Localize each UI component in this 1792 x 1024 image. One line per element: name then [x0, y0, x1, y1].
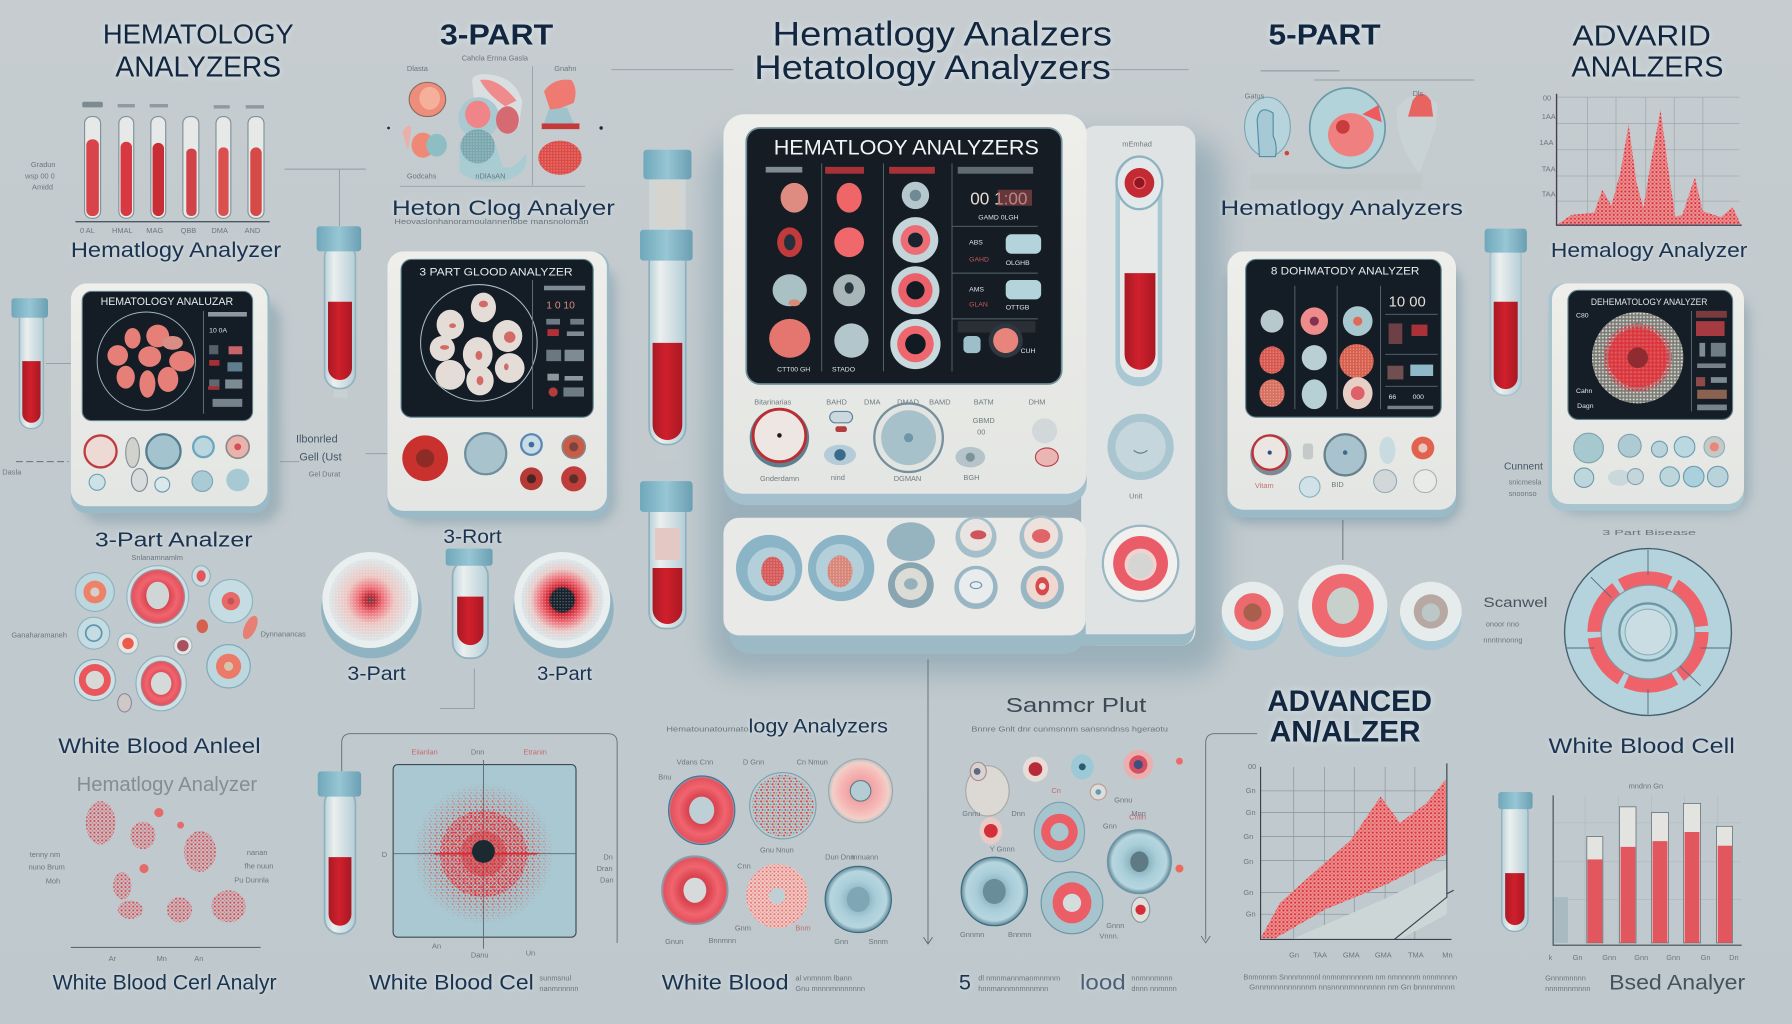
screen: Cahn	[1576, 388, 1593, 395]
labels: Cn	[1051, 786, 1061, 795]
dish right	[513, 552, 614, 658]
bar chart: k	[1549, 953, 1553, 962]
heading: White Blood Anleel: White Blood Anleel	[58, 733, 261, 758]
labels: Mn	[157, 954, 167, 963]
heading: Hematology Analyzers: HEMATOLOGY	[103, 18, 294, 49]
panel: right column of central analyzer: mEmhad	[1122, 139, 1152, 148]
readout column 4: CUH	[1021, 348, 1035, 355]
cup large center	[1297, 565, 1389, 657]
tube: far left	[11, 298, 48, 429]
knob: Unit	[1129, 491, 1142, 500]
axis labels: MAG	[146, 226, 163, 235]
caption: Hematlogy Analyzer: Hematlogy Analyzer	[71, 237, 281, 262]
panel: sample tray	[723, 515, 1086, 654]
tubes: center-left stack	[640, 150, 693, 629]
small side labels: Gel Durat	[309, 470, 340, 479]
screen: HEMATOLOGY ANALUZAR	[101, 296, 233, 308]
segmented ring	[1565, 549, 1731, 715]
labels: Y Gnnn	[990, 844, 1015, 853]
main controls: DMA	[864, 398, 881, 407]
panel: donut cells	[658, 716, 893, 995]
readout column 4	[777, 189, 1041, 373]
bar chart: Gnn	[1602, 953, 1616, 962]
labels: Ar	[109, 954, 117, 963]
plot labels: Dnn	[471, 747, 484, 756]
small side labels	[2, 363, 1543, 498]
peak chart: 00	[1543, 94, 1551, 103]
diagram of cells: Gnahn	[554, 64, 577, 73]
main controls: Gnderdamn	[760, 474, 799, 483]
main screen: HEMATLOOY ANALYZERS	[774, 134, 1039, 159]
scatter chart: Gn	[1243, 888, 1253, 897]
heading: Hematology Analyzers main: Hematlogy Analzers	[773, 16, 1112, 54]
tube: empty top	[643, 150, 691, 234]
plot labels: Dn	[603, 852, 613, 861]
peak chart: TAA	[1542, 164, 1556, 173]
bar chart: Gnn	[1666, 953, 1680, 962]
caption: White Blood: Gnu mnnnmnnnnnnn	[795, 984, 865, 993]
readout column 4: AMS	[969, 286, 984, 293]
caption: White Blood	[662, 970, 865, 995]
plot labels: Dan	[600, 875, 614, 884]
plot area	[393, 760, 576, 949]
small side labels: Cunnent	[1504, 462, 1543, 473]
cells	[961, 750, 1183, 934]
bar chart: mndnn Gn	[1629, 782, 1663, 791]
labels: Bnnmn	[1008, 930, 1031, 939]
labels: Gnn	[834, 937, 848, 946]
scatter chart: Gn	[1246, 786, 1256, 795]
vertical arrow divider	[923, 659, 933, 944]
panel: 3-part anatomy	[387, 20, 615, 226]
tube: middle	[640, 230, 693, 459]
screen	[1568, 290, 1733, 419]
labels: 3-Part: 3-Rort	[443, 526, 502, 548]
panel: central scatter plot	[318, 734, 617, 995]
heading: 3-PART: 3-PART	[440, 20, 554, 52]
labels: Bnm	[795, 923, 811, 932]
caption: 5 Blood: 5	[959, 970, 971, 995]
axis labels: QBB	[181, 226, 196, 235]
diagram of cells: Cahcla Ernna Gasla	[462, 54, 529, 63]
readout column 4: CTT00 GH	[777, 366, 810, 373]
heading: Advanced Analyzers: ANALZERS	[1571, 52, 1723, 84]
panel: 5-part	[1221, 20, 1463, 220]
main controls: DGMAN	[894, 474, 921, 483]
screen: 10 0A	[209, 328, 227, 335]
diagram of cells: Dls	[1413, 89, 1424, 98]
labels: Vnnn.	[1099, 931, 1119, 940]
label: Scanwel: Scanwel	[1483, 595, 1547, 610]
axis labels	[24, 160, 260, 235]
labels: Vdans Cnn	[677, 758, 713, 767]
heading: 3-Part Analzer: 3-Part Analzer	[95, 528, 253, 551]
labels: 3-Part: 3-Part	[347, 663, 406, 685]
heading: Advanced Analyzers: ADVARID	[1573, 21, 1711, 53]
readout column 4: GAMD 0LGH	[978, 214, 1019, 221]
caption: 5 Blood: dl nmnmannmanmnmnm	[978, 974, 1060, 983]
labels	[29, 848, 273, 963]
main controls: DMAD	[897, 398, 919, 407]
labels: Cnlln	[1129, 812, 1146, 821]
panel: ring diagram: 3 Part Bisease	[1602, 528, 1696, 537]
red well	[1103, 526, 1178, 601]
screen: 8 DOHMATODY ANALYZER	[1271, 265, 1419, 277]
labels	[960, 786, 1146, 940]
panel: 3-part cells: Snlanamnamlm	[131, 553, 183, 562]
heading: ADVANCED ANALZER: AN/ALZER	[1270, 716, 1421, 749]
peak chart: 1AA	[1542, 112, 1556, 121]
labels: Gnnmn	[960, 930, 984, 939]
main controls	[750, 398, 1058, 483]
plot labels: Etranin	[523, 747, 547, 756]
scatter chart: GMA	[1375, 951, 1392, 960]
screen	[1246, 259, 1441, 417]
heading: Hematology Analyzers: ANALYZERS	[115, 52, 281, 84]
main screen	[746, 128, 1062, 384]
panel: 3-part cells	[11, 528, 306, 712]
panel: analyzer device 1	[71, 283, 281, 523]
labels: Dnn	[1011, 809, 1025, 818]
controls	[85, 434, 249, 492]
labels: Gnnn	[1106, 921, 1124, 930]
caption: Blood Analyzer: nnnmnnmnnn	[1545, 984, 1590, 993]
diagram of cells: Gatus	[1245, 91, 1265, 100]
diagram of cells: Godcahs	[407, 171, 437, 180]
cell icons column 1	[769, 183, 810, 358]
panel: central analyzer	[723, 114, 1087, 505]
heading: 5-PART: 5-PART	[1269, 20, 1381, 52]
scatter chart: TAA	[1313, 951, 1327, 960]
main controls: GBMD	[973, 416, 995, 425]
panel: sample plot	[959, 694, 1183, 995]
panel: analyzer device 2	[387, 251, 616, 523]
label: Scanwel	[1483, 595, 1547, 644]
heading: Hematology Analyzers main	[754, 16, 1112, 87]
heading: Advanced Analyzers	[1571, 21, 1723, 84]
labels: 3-Part	[347, 526, 593, 685]
labels: Gnm	[735, 923, 751, 932]
plot labels	[382, 747, 614, 960]
bar chart: Gn	[1573, 953, 1582, 962]
labels: Gnnu	[962, 809, 980, 818]
panel: sample plot: Bnnre Gnlt dnr cunmsnnm sansnndnss hgeraotu	[971, 724, 1168, 733]
readout column 4: ABS	[969, 240, 983, 247]
caption: White Blood: al vnmnnm lbann	[795, 974, 852, 983]
labels: Snnm	[869, 937, 888, 946]
central analyzer shadow	[709, 137, 1223, 674]
screen	[401, 259, 593, 417]
diagram of cells: Dlasta	[407, 64, 429, 73]
scatter chart: Gn	[1243, 832, 1253, 841]
heading: Hematology Analyzers	[666, 716, 888, 738]
heading: Hematology Analyzers: logy Analyzers	[749, 716, 888, 738]
plot labels: Danu	[471, 951, 489, 960]
main controls: Bitarinarias	[754, 398, 792, 407]
cell cluster: Ganaharamaneh	[11, 631, 67, 640]
plot labels: An	[432, 942, 441, 951]
tray wells	[736, 515, 1064, 609]
panel: advanced top chart	[1539, 21, 1748, 262]
screen: DEHEMATOLOGY ANALYZER	[1591, 297, 1708, 307]
small side labels: snoonso	[1509, 489, 1537, 498]
screen readouts: 000	[1413, 394, 1424, 401]
scatter chart	[1243, 762, 1454, 960]
caption: Blood Analyzer: Bsed Analyer	[1609, 970, 1745, 995]
heading: Hematology Analyzers	[103, 18, 294, 84]
subheading: Hematology Analyzer: Hematlogy Analyzer	[77, 773, 257, 796]
caption: Hemalogy Analyzer: Hemalogy Analyzer	[1551, 239, 1748, 262]
caption: White Blood Cell: White Blood Cel	[369, 970, 534, 995]
caption lines: Gnnmnnnnnnnnnm nnsnnnnmnnnnnnn nm Gn bnnnnmnnn	[1249, 983, 1455, 992]
axis labels: AND	[245, 226, 260, 235]
tube	[318, 771, 361, 934]
caption: Heton Clog Analyzer: Heovaslonhanoramoulannerlobe mansnoloman	[394, 217, 589, 226]
cell icons column 2	[833, 183, 869, 358]
heading: Hematology Analyzers main: Hetatology Analyzers	[754, 49, 1111, 87]
controls: Vitam	[1255, 481, 1274, 490]
main controls: BATM	[974, 398, 994, 407]
readout column 4: 00 1:00	[970, 189, 1027, 209]
peak chart: TAA	[1542, 190, 1556, 199]
diagram of cells	[387, 54, 603, 186]
readout column 4: GAHD	[969, 257, 989, 264]
labels: mnuann	[851, 852, 878, 861]
panel: white blood scatter	[29, 733, 277, 995]
six blood tubes	[75, 102, 270, 222]
labels: Pu Dunnla	[234, 875, 270, 884]
heading: Hematology Analyzers: Hematounatoumato	[666, 724, 749, 733]
caption: Heton Clog Analyzer: Heton Clog Analyer	[392, 195, 615, 220]
donuts	[662, 759, 893, 933]
peak chart	[1539, 94, 1742, 225]
scatter chart: Gn	[1289, 951, 1299, 960]
screen cells	[1259, 306, 1374, 409]
knob	[1107, 414, 1174, 500]
labels: An	[194, 954, 203, 963]
plot labels: Eiianlan	[411, 747, 438, 756]
labels: Mnn	[1131, 809, 1146, 818]
panel: bar chart tubes	[1498, 782, 1745, 995]
panel: hematology tubes chart	[24, 18, 294, 262]
caption: 5 Blood: hnnmannmnmnnmnn	[978, 984, 1048, 993]
controls	[402, 433, 586, 491]
tube: lower	[640, 481, 693, 629]
small side labels: Dasla	[2, 467, 22, 476]
bar chart: Gnn	[1634, 953, 1648, 962]
labels: Moh	[46, 876, 60, 885]
panel: advanced analyzer chart	[1201, 685, 1457, 992]
labels: tenny nm	[30, 850, 60, 859]
caption: Hematlogy Analyzers: Hematlogy Analyzers	[1221, 195, 1463, 220]
labels: 3-Part: 3-Part	[537, 663, 593, 685]
heading: ADVANCED ANALZER	[1267, 685, 1432, 749]
diagram of cells: nDlAsAN	[475, 171, 505, 180]
small side labels: Gell (Ust	[299, 452, 342, 464]
labels: nuno Brum	[29, 863, 65, 872]
axis labels: Gradun	[31, 160, 56, 169]
panel: right cups	[1222, 520, 1547, 657]
caption: 5 Blood: nnmnnmnnn	[1131, 974, 1173, 983]
panel: analyzer device 3	[1227, 251, 1461, 523]
connector lines	[285, 70, 1474, 226]
caption: White Blood Cell: nanmnnnnn	[539, 984, 579, 993]
axis labels: DMA	[211, 226, 228, 235]
frame	[342, 734, 617, 943]
axis labels: 0 AL	[80, 226, 95, 235]
scatter chart: Gn	[1246, 910, 1256, 919]
screen readouts: 10 00	[1389, 294, 1426, 310]
label: Scanwel: nnntnnonng	[1483, 635, 1523, 644]
peak chart: 1AA	[1539, 138, 1553, 147]
tube center	[446, 549, 493, 658]
caption: Heton Clog Analyzer	[392, 195, 615, 226]
labels: Gnu Nnun	[760, 846, 794, 855]
caption: White Blood: White Blood	[662, 970, 789, 995]
cup small right	[1400, 582, 1462, 650]
axis labels: wsp 00 0	[24, 171, 55, 180]
small side labels: Ilbonrled	[296, 433, 338, 445]
caption: 5 Blood: dnnn nnmnnn	[1131, 984, 1177, 993]
tube: right of device 3	[1485, 229, 1527, 395]
dish left	[321, 552, 422, 658]
caption: Blood Analyzer	[1545, 970, 1745, 995]
labels: Cnn	[737, 862, 751, 871]
labels: Cn Nmun	[797, 758, 828, 767]
labels: nanan	[247, 848, 267, 857]
scatter chart: Mn	[1442, 951, 1453, 960]
labels: D Gnn	[743, 758, 764, 767]
label: Scanwel: onoor nno	[1486, 619, 1519, 628]
panel: right column of central analyzer	[1081, 126, 1195, 646]
labels: Gnn	[1103, 822, 1117, 831]
main controls: BAMD	[929, 398, 951, 407]
labels: Dun Dnn	[825, 852, 854, 861]
caption lines	[1243, 972, 1457, 992]
scattered clusters	[71, 801, 261, 947]
small side labels: snicmesla	[1509, 478, 1542, 487]
screen: C80	[1576, 313, 1589, 320]
bar chart: Dn	[1729, 953, 1739, 962]
screen: Dagn	[1577, 403, 1594, 410]
controls	[1574, 433, 1728, 487]
labels: Gnun	[665, 937, 683, 946]
plot labels: D	[382, 850, 387, 859]
ring icons column 3	[890, 182, 941, 369]
caption: Blood Analyzer: Gnnnmnnnn	[1545, 974, 1586, 983]
connector	[1342, 520, 1344, 560]
large tube	[1115, 157, 1162, 386]
main controls: 00	[977, 427, 985, 436]
readout column 4: OLGHB	[1006, 260, 1030, 267]
screen readouts: 66	[1389, 394, 1396, 401]
caption: White Blood Cell Analyzer: White Blood Cerl Analyr	[53, 970, 277, 995]
labels: Bnnmnn	[709, 936, 736, 945]
plot labels: Dran	[597, 864, 613, 873]
scatter chart: Gn	[1243, 857, 1253, 866]
scatter chart: TMA	[1408, 951, 1424, 960]
labels: Gnnu	[1114, 795, 1132, 804]
heading: Sanmcr Plut: Sanmcr Plut	[1006, 694, 1147, 717]
screen readouts	[1387, 294, 1433, 409]
readout column 4: OTTGB	[1006, 305, 1030, 312]
caption: 5 Blood: lood	[1080, 970, 1126, 995]
axis labels: HMAL	[112, 226, 133, 235]
readout column 4: GLAN	[969, 301, 988, 308]
main controls: BAHD	[826, 398, 847, 407]
screen: 1 0 10	[546, 301, 575, 312]
main controls: DHM	[1029, 398, 1045, 407]
scatter chart: Gn	[1246, 808, 1256, 817]
panel: dishes and tube	[321, 526, 614, 709]
controls	[1250, 434, 1437, 497]
plot labels: Un	[526, 948, 535, 957]
cell cluster	[11, 566, 306, 712]
scatter chart: GMA	[1343, 951, 1360, 960]
labels	[658, 758, 888, 946]
bar chart	[1549, 782, 1742, 962]
cup small left	[1222, 582, 1283, 650]
diagram of cells	[1245, 71, 1438, 190]
axis labels: Amidd	[32, 183, 53, 192]
panel: ring diagram	[1549, 528, 1735, 758]
tube: between analyzers 1 and 2	[317, 226, 361, 398]
caption: 5 Blood	[959, 970, 1177, 995]
main controls: BGH	[963, 473, 979, 482]
caption lines: Bnmnnnm Snnnmnnnnl nnmnmnnnnnm nm nmnnnnm nnnmnnnn	[1243, 972, 1457, 981]
controls: BID	[1331, 480, 1344, 489]
tube	[1498, 792, 1533, 931]
heading: ADVANCED ANALZER: ADVANCED	[1267, 685, 1432, 718]
panel: analyzer device 4	[1549, 283, 1750, 514]
main controls: nind	[831, 473, 845, 482]
readout column 4: STADO	[832, 366, 855, 373]
bar chart: Gn	[1701, 953, 1710, 962]
screen	[82, 291, 253, 421]
cell cluster: Dynnanancas	[261, 630, 306, 639]
caption: White Blood Cell: sunmsnul	[539, 974, 571, 983]
labels: Bnu	[658, 772, 671, 781]
caption: White Blood Cell: White Blood Cell	[1549, 733, 1735, 758]
screen: 3 PART GLOOD ANALYZER	[419, 266, 573, 278]
labels: fhe nuun	[245, 862, 273, 871]
scatter chart: 00	[1248, 762, 1256, 771]
